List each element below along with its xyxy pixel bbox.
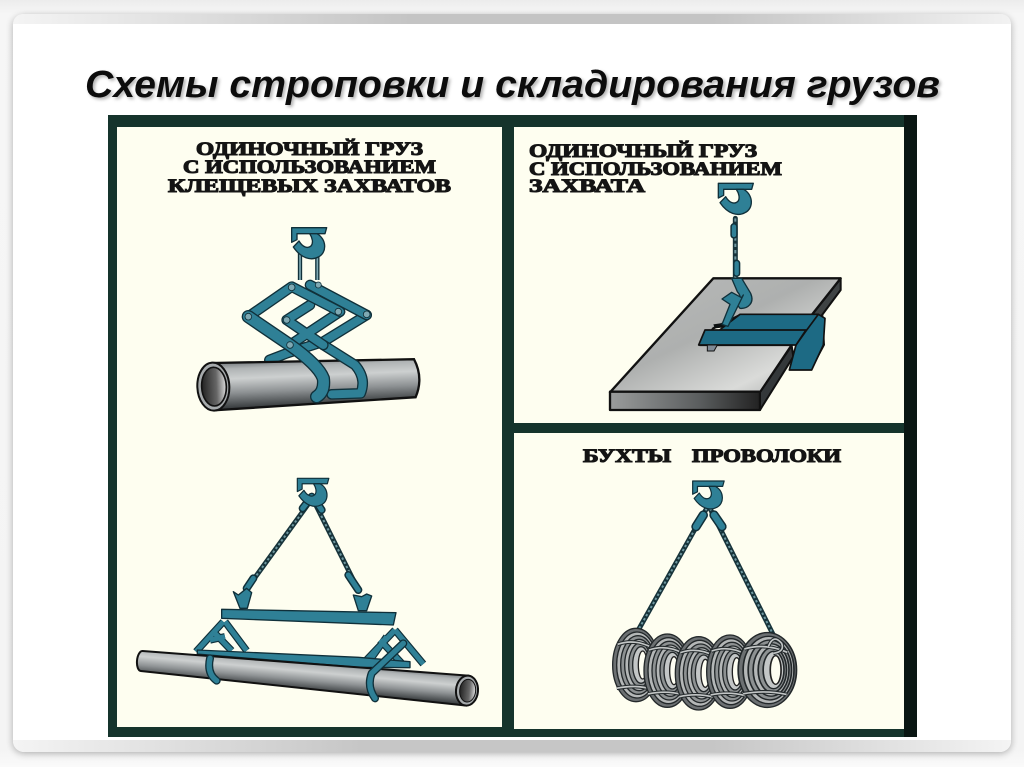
panel: single load with tong grabs and spreader beam [117, 127, 502, 727]
poster frame [108, 115, 917, 737]
bottom shaded band [13, 740, 1011, 752]
coil 3 [675, 637, 722, 710]
rope slings [247, 497, 358, 590]
panel: wire coils [514, 433, 904, 729]
heading: tong grabs [168, 138, 451, 197]
heading: grab [529, 140, 782, 197]
top shaded band [13, 14, 1011, 24]
heading: grab: ЗАХВАТА [529, 177, 646, 197]
coil 4 [707, 635, 753, 708]
illustration: wire coils on slings [613, 481, 796, 710]
heading: wire coils: ПРОВОЛОКИ [692, 447, 842, 467]
coil 2 [644, 634, 691, 707]
illustration: pipe held by scissor tongs [196, 228, 420, 411]
heading: grab: ОДИНОЧНЫЙ ГРУЗ [529, 140, 757, 162]
coil 1 [613, 628, 659, 702]
heading: grab: С ИСПОЛЬЗОВАНИЕМ [529, 160, 782, 180]
heading: tong grabs: КЛЕЩЕВЫХ ЗАХВАТОВ [168, 177, 451, 197]
heading: tong grabs: С ИСПОЛЬЗОВАНИЕМ [183, 158, 436, 178]
panel: single load with grab [514, 127, 904, 423]
illustration: pipe on spreader beam [136, 478, 479, 707]
coil 5 [738, 633, 796, 707]
heading: wire coils [583, 447, 842, 467]
illustration: steel plate lifted by grab [610, 183, 841, 410]
title: Схемы строповки и складирования грузов [85, 64, 940, 106]
heading: tong grabs: ОДИНОЧНЫЙ ГРУЗ [196, 138, 423, 160]
heading: wire coils: БУХТЫ [583, 447, 671, 467]
